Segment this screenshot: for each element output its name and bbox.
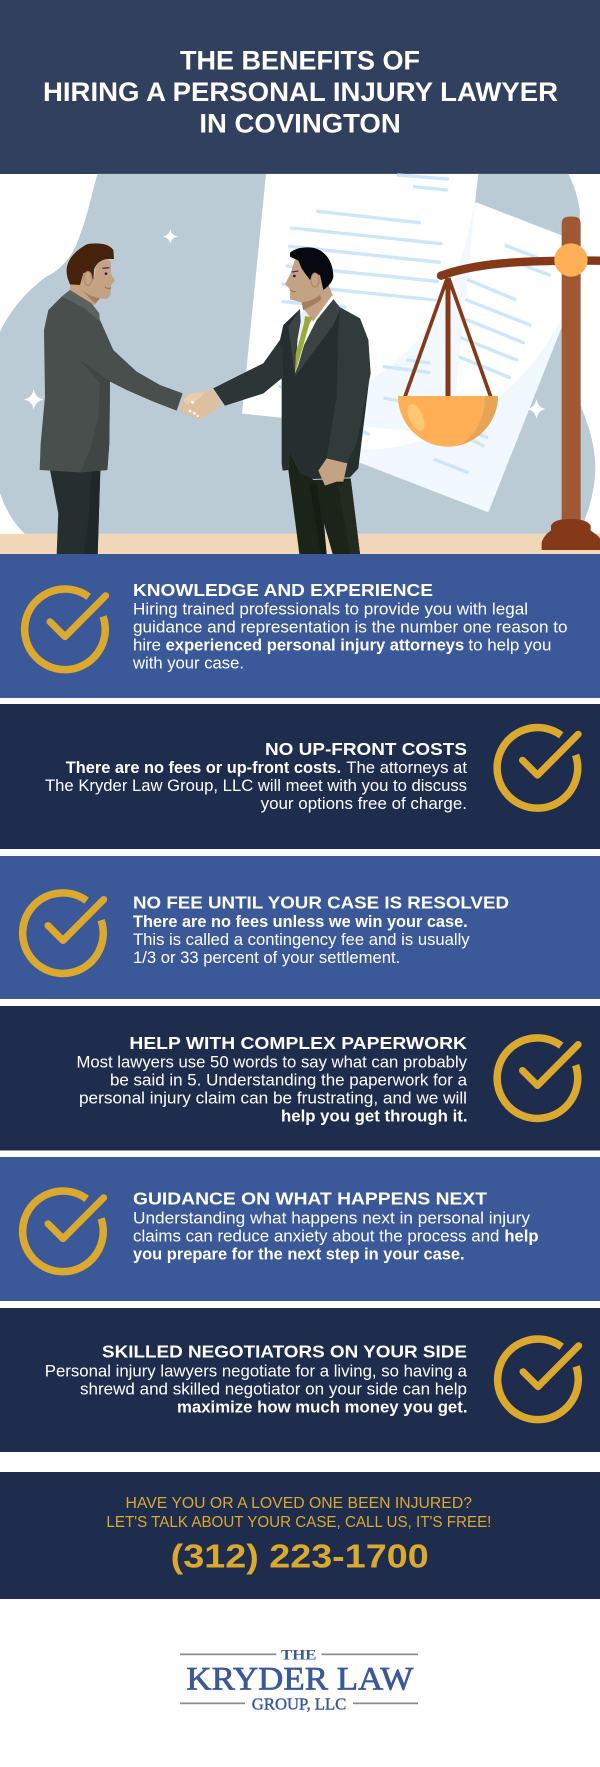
- body text: [132, 600, 568, 672]
- body text: [45, 1362, 468, 1416]
- strings: [405, 278, 491, 397]
- heading: HELP WITH COMPLEX PAPERWORK: [129, 1033, 467, 1053]
- background blob and floor: [0, 174, 600, 554]
- scales of justice: [398, 217, 600, 550]
- call to action text: [106, 1495, 491, 1531]
- figure: client in grey suit: [40, 243, 183, 554]
- sparkles: [24, 228, 546, 419]
- body text: you prepare for the next step in your case.: [133, 1245, 465, 1263]
- icon: gold check circle: [497, 1038, 578, 1118]
- panel: no up-front costs: [0, 704, 600, 849]
- title: IN COVINGTON: [199, 108, 401, 138]
- call to action panel: [0, 1472, 600, 1599]
- heading: SKILLED NEGOTIATORS ON YOUR SIDE: [102, 1342, 467, 1362]
- icon: gold check circle: [23, 893, 104, 973]
- body text: Most lawyers use 50 words to say what can probably: [76, 1053, 468, 1071]
- icon: gold check circle: [497, 728, 578, 808]
- body text: There are no fees or up-front costs.: [66, 759, 341, 777]
- body text: shrewd and skilled negotiator on your side can help: [80, 1380, 467, 1398]
- title: [43, 46, 558, 138]
- body text: maximize how much money you get.: [177, 1398, 468, 1416]
- figure: lawyer in dark suit with green tie: [213, 247, 371, 554]
- body text: Understanding what happens next in personal injury: [133, 1209, 531, 1227]
- illustration: handshake between client and lawyer with scales of justice: [0, 174, 600, 554]
- icon: gold check circle: [25, 589, 106, 670]
- logo: The Kryder Law Group, LLC: [180, 1647, 418, 1713]
- body text: [133, 1209, 538, 1263]
- call to action text: LET'S TALK ABOUT YOUR CASE, CALL US, IT'S FREE!: [106, 1514, 491, 1531]
- icon: gold check circle: [498, 1339, 579, 1420]
- body text: personal injury claim can be frustrating, and we will: [79, 1089, 467, 1107]
- panel: knowledge and experience: [0, 554, 600, 698]
- body text: [45, 759, 467, 813]
- logo: The Kryder Law Group, LLC: KRYDER LAW: [186, 1662, 414, 1698]
- base: [542, 519, 600, 550]
- body text: 1/3 or 33 percent of your settlement.: [133, 949, 400, 967]
- body text: with your case.: [132, 654, 244, 672]
- body text: There are no fees unless we win your case.: [133, 913, 468, 931]
- pole: [562, 217, 581, 524]
- body text: The Kryder Law Group, LLC will meet with you to discuss: [45, 777, 467, 795]
- bowl: [398, 396, 498, 447]
- body text: to help you: [468, 636, 551, 654]
- body text: The attorneys at: [346, 759, 467, 777]
- call to action text: HAVE YOU OR A LOVED ONE BEEN INJURED?: [126, 1495, 472, 1512]
- panel: skilled negotiators on your side: [0, 1308, 600, 1452]
- body text: guidance and representation is the number one reason to: [133, 618, 568, 636]
- heading: NO UP-FRONT COSTS: [265, 739, 467, 759]
- header banner: [0, 0, 600, 174]
- body text: help: [504, 1227, 538, 1245]
- body text: experienced personal injury attorneys: [166, 636, 464, 654]
- panel: no fee until your case is resolved: [0, 856, 600, 999]
- heading: GUIDANCE ON WHAT HAPPENS NEXT: [133, 1189, 487, 1209]
- title: THE BENEFITS OF: [180, 46, 420, 76]
- body text: help you get through it.: [281, 1107, 468, 1125]
- body text: This is called a contingency fee and is usually: [133, 931, 470, 949]
- beam: [441, 261, 600, 276]
- title: HIRING A PERSONAL INJURY LAWYER: [43, 77, 558, 107]
- documents: [242, 174, 580, 512]
- logo: The Kryder Law Group, LLC: THE: [281, 1647, 316, 1663]
- panel: help with complex paperwork: [0, 1006, 600, 1150]
- body text: [76, 1053, 468, 1125]
- heading: KNOWLEDGE AND EXPERIENCE: [133, 580, 433, 600]
- phone number: (312) 223-1700: [171, 1538, 429, 1575]
- body text: Personal injury lawyers negotiate for a living, so having a: [45, 1362, 468, 1380]
- panel: guidance on what happens next: [0, 1157, 600, 1301]
- body text: be said in 5. Understanding the paperwork for a: [110, 1071, 468, 1089]
- heading: NO FEE UNTIL YOUR CASE IS RESOLVED: [133, 893, 509, 913]
- body text: your options free of charge.: [261, 795, 467, 813]
- handshake hands: [180, 390, 222, 419]
- body text: [133, 913, 470, 967]
- logo: The Kryder Law Group, LLC: GROUP, LLC: [252, 1694, 346, 1713]
- body text: claims can reduce anxiety about the process and: [133, 1227, 499, 1245]
- icon: gold check circle: [23, 1191, 104, 1272]
- body text: Hiring trained professionals to provide you with legal: [133, 600, 528, 618]
- body text: hire: [133, 636, 161, 654]
